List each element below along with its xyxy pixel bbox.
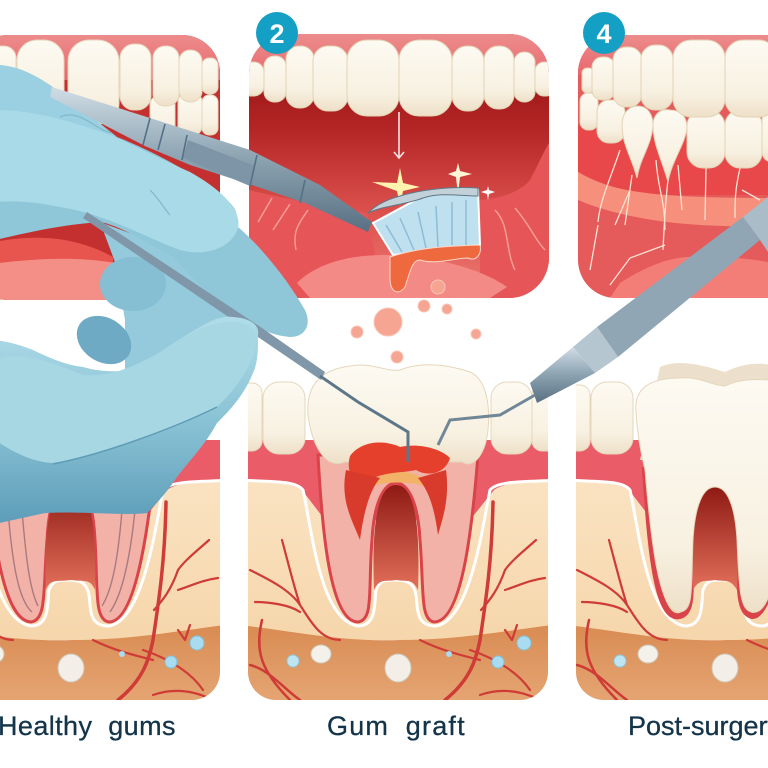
healed tooth: [636, 363, 768, 616]
badge: step 4: 4: [596, 19, 612, 49]
label: healthy gums: Healthy gums: [0, 711, 176, 741]
panel: top middle mouth with brush: [240, 34, 555, 298]
arrow: down to brush: [394, 112, 404, 158]
badge: step 4: [583, 12, 625, 54]
badge: step 2: 2: [269, 19, 285, 49]
icon: sparkles: [372, 163, 495, 206]
panel: post-surgery: [566, 363, 768, 710]
side teeth: [238, 382, 556, 454]
panel: healthy gums: [0, 440, 233, 710]
instrument: scaler right: [438, 197, 768, 445]
instrument: lower probe: [83, 212, 408, 462]
instrument: upper handle: [50, 87, 372, 232]
tooth roots: [0, 509, 151, 624]
panel: top left mouth: [0, 35, 220, 300]
tooth with exposed root: [308, 365, 489, 622]
glove: upper hand: [0, 65, 308, 337]
side tooth: [576, 382, 634, 454]
glove: curled fingers and palm: [68, 222, 240, 375]
tongue: [297, 255, 507, 298]
icon: tissue fragments: [351, 280, 481, 363]
upper teeth: [240, 40, 555, 116]
icon: toothbrush: [368, 187, 480, 292]
panel: gum graft: [238, 365, 560, 710]
glove: lower hand: [0, 317, 258, 524]
panel: top right mouth: [578, 35, 768, 298]
badge: step 2: [256, 12, 298, 54]
tongue: [610, 256, 768, 298]
label: gum graft: Gum graft: [327, 711, 466, 741]
lower gum: [249, 143, 549, 298]
